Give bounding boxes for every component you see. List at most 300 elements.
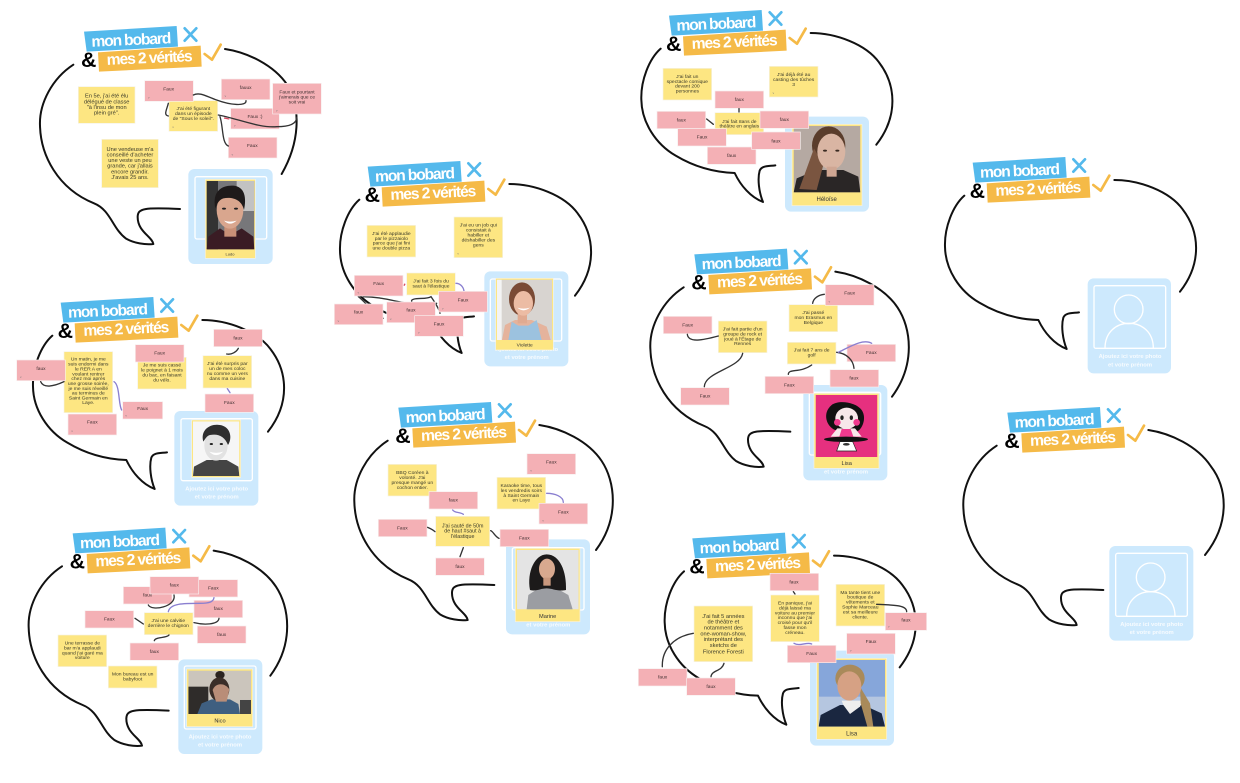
heading: mon bobard and mes 2 vérités (395, 402, 535, 448)
sticky: faux top right (214, 329, 262, 347)
note: poignet: du bac, en faisant (142, 372, 182, 378)
sticky: faux left: faux (658, 674, 668, 680)
note: RER: voulant rentrer (72, 371, 105, 377)
sticky: Faux (145, 81, 193, 101)
sticky: faux bottom (436, 558, 484, 575)
note: BBQ: BBQ Coréen à (396, 470, 429, 476)
sticky: Faux 4: Faux (434, 321, 445, 327)
note: théâtre: théâtre en anglais (720, 124, 760, 130)
note: Florence Foresti: J'ai fait 5 années (702, 614, 745, 620)
sticky: faux 4 (194, 600, 243, 618)
photo: black and white portrait (192, 420, 241, 477)
note: Erasmus: Belgique (804, 320, 823, 326)
sticky: faux top: faux (449, 498, 458, 504)
photo frame: et votre prénom (195, 495, 239, 501)
sticky: Faux right: Faux (866, 350, 877, 356)
note: BBQ: volonté. J'ai (399, 475, 425, 481)
sticky: Faux bottom left: Faux (700, 394, 711, 400)
sticky: faux 2: v (338, 319, 340, 323)
heading: mon bobard and mes 2 vérités (691, 249, 831, 295)
speech bubble (665, 556, 916, 725)
connectors behind (358, 283, 464, 318)
photo card: Ludo: Ludo (226, 251, 235, 256)
note: poignet: Je me suis cassé (143, 363, 181, 369)
note: spectacle: personnes (676, 89, 699, 95)
heading: mon bobard and mes 2 vérités: mon bobard (375, 165, 455, 186)
note: job: consistait à (466, 228, 491, 234)
sticky: fauux: fauux (240, 85, 252, 91)
note: coloc: dans ma cuisine (209, 376, 246, 382)
speech bubble (354, 425, 613, 620)
connectors (135, 595, 219, 641)
note: Sophie Marceau: boutique de (847, 595, 874, 601)
heading: mon bobard and mes 2 vérités: mes 2 vérités (106, 48, 193, 69)
heading: mon bobard and mes 2 vérités: mes 2 vérités (421, 424, 508, 445)
note: calvitie: derrière le chignon (148, 623, 189, 629)
note: terrasse (58, 635, 107, 667)
note: RER: suis endormi dans (68, 361, 109, 367)
sticky: Faux top right (825, 285, 874, 305)
note: Karaoke (497, 477, 546, 509)
sticky: Faux mid (847, 633, 895, 654)
note: BBQ: presque mangé un (392, 480, 433, 486)
note: Florence Foresti: sketchs de (710, 643, 737, 649)
sticky: Faux 5 (439, 291, 487, 312)
note: Karaoke: les vendredis soirs (501, 488, 542, 494)
sticky: Faux below note: Faux (87, 420, 98, 426)
sticky: Faux 2: Faux (558, 509, 569, 515)
sticky: fauux: v (225, 94, 227, 98)
heading: mon bobard and mes 2 vérités: mes 2 vérités (691, 32, 778, 53)
photo frame: et votre prénom (198, 743, 242, 749)
note: Florence Foresti: notamment des (704, 626, 743, 632)
sticky: Faux 5: Faux (458, 297, 469, 303)
sticky: faux right (885, 613, 927, 630)
sticky: Faux :) (231, 108, 279, 129)
heading: mon bobard and mes 2 vérités (666, 10, 806, 56)
panel: empty template card 2 (963, 407, 1224, 641)
sticky: faux (830, 370, 879, 387)
note: saut 50m: J'ai sauté de 50m (442, 524, 484, 530)
heading: mon bobard and mes 2 vérités: mes 2 vérités (715, 555, 802, 576)
sticky: Faux 1 (354, 275, 403, 296)
sticky: faux left (17, 360, 65, 381)
sticky: faux 3: faux (406, 308, 416, 314)
note: Erasmus: J'ai passé (802, 310, 825, 316)
sticky: Faux 3 (189, 580, 238, 597)
heading: mon bobard and mes 2 vérités (689, 533, 829, 579)
panel: Violette card (334, 161, 591, 366)
note: théâtre (715, 113, 764, 135)
note: créneau: fasse mon (783, 625, 807, 631)
sticky: faux right: faux (901, 617, 911, 623)
note: job: v (457, 251, 459, 255)
note: spectacle: devant 200 (675, 84, 700, 90)
heading: mon bobard and mes 2 vérités: & (395, 424, 411, 448)
note: créneau (771, 595, 819, 642)
photo frame: et votre prénom (526, 623, 570, 629)
note: créneau: En panique, j'ai (778, 601, 812, 607)
sticky: Faux et pourtant (273, 83, 321, 114)
note: élu délégué: délégué de classe (84, 99, 129, 105)
photo frame (785, 117, 869, 212)
photo card: Lisa (817, 658, 887, 739)
note: créneau: inconnu que j'ai (778, 615, 812, 621)
note: pizza: une double pizza (372, 246, 410, 252)
speech bubble (40, 49, 297, 244)
note: spectacle: spectacle comique (667, 79, 708, 85)
note: babyfoot: babyfoot (123, 677, 143, 683)
sticky: faux 5 (197, 626, 246, 643)
note: Karaoke: Karaoke time, tous (501, 483, 543, 489)
sticky: Faux et pourtant: j'aimerais que ce (278, 94, 315, 100)
sticky: Faux et pourtant: soit vrai (289, 99, 305, 105)
note: job: J'ai eu un job qui (460, 223, 497, 229)
sticky: faux 2 (334, 304, 383, 325)
note: groupe de rock: joué à l'Étage de (723, 335, 761, 342)
sticky: Faux bottom: v (232, 152, 234, 156)
note: job: gens (473, 242, 484, 248)
connectors (687, 294, 872, 387)
photo frame: Ajoutez ici votre photo (495, 347, 559, 353)
photo frame: et votre prénom (505, 355, 549, 361)
photo card: Violette (496, 278, 553, 350)
note: figurant: J'ai été figurant (177, 106, 211, 112)
sticky: Faux 3: Faux (208, 585, 219, 591)
note: créneau: voiture au premier (775, 610, 815, 616)
sticky: Faux right (500, 529, 549, 547)
sticky: Faux left (663, 316, 712, 334)
sticky: Faux 5: v (442, 306, 444, 310)
note: vendeuse: grande, car j'allais (107, 164, 153, 170)
note: élu délégué: "à l'insu de mon (87, 105, 127, 111)
sticky: faux bottom: faux (706, 684, 716, 690)
panel: anonymous RER card (17, 297, 284, 506)
sticky: faux 3: v (390, 317, 392, 321)
note: pizza (367, 225, 416, 257)
photo card: Ludo (205, 179, 255, 258)
sticky: Faux below note: v (71, 429, 73, 433)
note: terrasse: Une terrasse de (65, 640, 100, 646)
note: poignet: du vélo. (153, 377, 171, 383)
heading: mon bobard and mes 2 vérités: mon bobard (676, 14, 757, 35)
note: vendeuse (102, 139, 158, 188)
note: Sophie Marceau: est sa meilleure (843, 609, 878, 615)
note: terrasse: voiture (75, 655, 90, 661)
sticky: faux 7 (130, 643, 179, 660)
note: créneau: croisé pour qu'il (778, 620, 812, 626)
sticky: faux left: v (20, 375, 22, 379)
note: RER: le RER A en (75, 366, 102, 372)
heading: mon bobard and mes 2 vérités: & (70, 550, 85, 574)
sticky: Faux under coloc (205, 394, 254, 412)
sticky: faux 2 (150, 577, 199, 594)
note: saut 50m: l'élastique (451, 534, 474, 540)
speech bubble (29, 551, 287, 746)
sticky: faux right: v (888, 625, 890, 629)
sticky: Faux center (787, 645, 836, 663)
note: RER: au terminus de (72, 391, 105, 397)
heading: mon bobard and mes 2 vérités: mon bobard (405, 406, 486, 427)
speech bubble (963, 430, 1224, 625)
speech bubble (650, 272, 909, 467)
note: BBQ: cochon entier. (397, 485, 428, 491)
sticky: Faux 1: v (530, 469, 532, 473)
note: RER: je me suis réveillé (68, 386, 108, 392)
note: spectacle (663, 68, 712, 100)
heading: mon bobard and mes 2 vérités: mon bobard (980, 161, 1060, 182)
photo placeholder (1088, 278, 1171, 373)
note: élastique: J'ai fait 3 fois du (413, 279, 449, 285)
sticky: Faux on poignet (135, 345, 184, 362)
note: calvitie: J'ai une calvitie (152, 618, 185, 624)
speech bubble (945, 180, 1196, 349)
note: groupe de rock (718, 321, 767, 353)
photo placeholder: et votre prénom (1130, 630, 1174, 636)
sticky: faux bottom (707, 147, 756, 164)
note: job (454, 217, 503, 258)
heading: mon bobard and mes 2 vérités (81, 26, 221, 72)
photo card: Héloïse: Héloïse (817, 197, 837, 203)
note: vendeuse: encore grandir. (111, 169, 149, 175)
sticky: Faux bottom (765, 376, 814, 394)
heading: mon bobard and mes 2 vérités: & (1004, 429, 1020, 453)
note: élu délégué (78, 87, 135, 123)
sticky: Faux 2 (539, 503, 588, 524)
note: calvitie (144, 613, 193, 635)
photo frame (506, 539, 590, 634)
note: Sophie Marceau: Sophie Marceau (842, 604, 879, 610)
note: terrasse: bar m'a applaudi (64, 645, 101, 651)
sticky: faux bottom (687, 678, 735, 695)
sticky: faux 5: faux (217, 632, 227, 638)
panel: Nico card (29, 528, 287, 754)
sticky: faux left: faux (677, 117, 686, 123)
sticky: faux bottom: faux (455, 564, 465, 570)
note: coloc: J'ai été surpris par (207, 361, 248, 367)
photo placeholder: et votre prénom (1108, 362, 1152, 368)
note: Florence Foresti: de théâtre et (707, 620, 740, 626)
note: Florence Foresti: Florence Foresti (703, 650, 744, 656)
sticky: Faux center: Faux (806, 651, 818, 657)
note: Florence Foresti (694, 606, 753, 662)
panel: Héloïse card (641, 10, 892, 212)
sticky: Faux left: Faux (682, 322, 694, 328)
sticky: faux left (638, 669, 687, 686)
sticky: Faux mid: Faux (866, 639, 877, 645)
note: Karaoke: en Laye (512, 498, 530, 504)
heading: mon bobard and mes 2 vérités: mes 2 vérités (83, 319, 170, 340)
photo frame (484, 271, 568, 366)
sticky: Faux left (378, 519, 427, 537)
sticky: Faux right: Faux (519, 535, 530, 541)
sticky: Faux 6 (85, 611, 134, 628)
sticky: faux top: faux (789, 579, 799, 585)
note: groupe de rock: J'ai fait partie d'un (723, 327, 763, 333)
photo frame (178, 659, 262, 754)
heading: mon bobard and mes 2 vérités: & (689, 555, 705, 579)
panel: empty template card 1 (945, 157, 1196, 373)
note: élastique: saut à l'élastique (413, 284, 450, 290)
photo frame: et votre prénom (824, 470, 868, 476)
heading: mon bobard and mes 2 vérités: mon bobard (80, 532, 160, 552)
connectors (166, 94, 297, 146)
note: élastique (407, 273, 455, 295)
heading: mon bobard and mes 2 vérités: & (970, 179, 985, 203)
note: babyfoot (108, 666, 157, 688)
sticky: Faux (678, 129, 726, 146)
note: poignet (138, 357, 186, 389)
sticky: faux 4: faux (214, 606, 223, 612)
sticky: Faux 1: Faux (546, 459, 557, 465)
sticky: faux right 2 (752, 132, 800, 149)
note: vendeuse: une veste un peu (108, 158, 152, 164)
photo card: Nico (187, 669, 253, 727)
heading: mon bobard and mes 2 vérités (365, 161, 504, 207)
sticky: faux 1 (123, 587, 172, 604)
note: RER: chez moi après (71, 376, 106, 382)
heading: mon bobard and mes 2 vérités: mon bobard (91, 30, 172, 51)
photo card: Lisa: Lisa (846, 731, 858, 737)
connectors (41, 348, 238, 410)
note: job: habiller et (468, 233, 490, 239)
note: Erasmus (789, 305, 838, 332)
note: BBQ (388, 464, 437, 496)
note: figurant: de "Sous le soleil". (173, 116, 214, 122)
sticky: Faux 1: Faux (373, 281, 385, 287)
sticky: Faux 4: v (418, 331, 420, 335)
photo placeholder: Ajoutez ici votre photo (1120, 622, 1184, 628)
sticky: Faux et pourtant: v (276, 108, 278, 112)
heading: mon bobard and mes 2 vérités (70, 528, 209, 574)
heading: mon bobard and mes 2 vérités (58, 297, 197, 343)
photo frame: Ajoutez ici votre photo (185, 487, 249, 493)
sticky: faux left: faux (36, 366, 46, 372)
photo frame (810, 651, 894, 746)
note: RER: Laye. (82, 400, 94, 406)
note: saut 50m: de haut #saut à (444, 529, 481, 535)
heading: mon bobard and mes 2 vérités: mon bobard (699, 537, 780, 557)
photo placeholder (1109, 546, 1193, 641)
note: figurant: dans un épisode (175, 111, 212, 117)
note: RER (64, 352, 113, 413)
note: figurant (169, 101, 218, 131)
sticky: Faux: Faux (697, 134, 708, 140)
note: Sophie Marceau: Ma tante tient une (840, 590, 881, 596)
heading: mon bobard and mes 2 vérités: & (365, 183, 380, 207)
sticky: faux 7: faux (150, 649, 159, 655)
heading: mon bobard and mes 2 vérités: & (691, 271, 707, 295)
photo card: Héloïse (792, 124, 862, 206)
note: pizza: J'ai été applaudie (372, 231, 411, 237)
sticky: Faux bottom: Faux (784, 382, 795, 388)
speech bubble (33, 320, 284, 489)
note: créneau: créneau. (785, 630, 805, 636)
photo card: Lisa illustration: Lisa (841, 461, 853, 467)
note: RER: Un matin, je me (71, 357, 106, 363)
note: golf: golf (808, 353, 816, 359)
sticky: Faux 1: v (358, 290, 360, 294)
note: babyfoot: Mon bureau est un (112, 672, 154, 678)
sticky: faux 1: faux (143, 592, 153, 598)
photo card: Marine (515, 548, 580, 622)
note: coloc: un de mes coloc (209, 366, 246, 372)
photo card: Lisa illustration (814, 393, 879, 468)
sticky: faux 2: faux (170, 583, 179, 589)
note: tûches (769, 66, 818, 97)
sticky: faux top (715, 91, 764, 108)
heading: mon bobard and mes 2 vérités: mes 2 vérités (95, 550, 182, 571)
photo placeholder: Ajoutez ici votre photo (1099, 354, 1162, 360)
connectors (428, 493, 563, 557)
sticky: faux top (429, 492, 478, 509)
note: théâtre: J'ai fait 8ans de (722, 119, 757, 125)
photo frame (174, 411, 258, 506)
panel: Lisa photo card (638, 533, 927, 746)
sticky: Faux: Faux (163, 86, 175, 92)
sticky: faux right 1 (760, 111, 809, 128)
heading: mon bobard and mes 2 vérités (970, 157, 1109, 203)
sticky: Faux bottom left (681, 388, 729, 405)
note: Sophie Marceau: vêtements et (846, 599, 875, 605)
sticky: Faux under coloc: Faux (224, 400, 235, 406)
note: terrasse: quand j'ai garé ma (62, 650, 103, 656)
sticky: Faux bottom: Faux (247, 143, 258, 149)
sticky: Faux 1 (527, 454, 576, 474)
note: Sophie Marceau: cliente. (852, 614, 868, 620)
note: Karaoke: à Saint Germain (503, 493, 540, 499)
sticky: faux right 1: faux (780, 117, 789, 123)
sticky: faux: faux (849, 376, 859, 382)
sticky: faux bottom: faux (727, 153, 737, 159)
sticky: Faux right of note: Faux (137, 406, 149, 412)
speech bubble (340, 184, 591, 353)
panel: Lisa illustrated card (650, 249, 909, 480)
note: golf: J'ai fait 7 ans de (794, 348, 830, 354)
note: RER: une grosse soirée, (68, 381, 109, 387)
note: vendeuse: Une vendeuse m'a (106, 147, 154, 153)
sticky: Faux on poignet: Faux (154, 351, 166, 357)
heading: mon bobard and mes 2 vérités: mes 2 vérités (995, 179, 1082, 200)
note: coloc: nu comme un vers (207, 371, 248, 377)
note: tûches: J'ai déjà été au (777, 72, 811, 78)
note: groupe de rock: Rennes (734, 341, 752, 347)
photo frame: Ajoutez ici votre photo (189, 735, 252, 741)
sticky: Faux right (847, 344, 896, 362)
speech bubble (641, 33, 892, 202)
note: job: déshabiller des (462, 237, 496, 243)
note: spectacle: J'ai fait un (676, 74, 699, 80)
sticky: Faux bottom (228, 137, 277, 158)
sticky: Faux mid: v (850, 648, 852, 652)
sticky: Faux right of note: v (125, 413, 127, 417)
sticky: Faux et pourtant: Faux et pourtant (279, 89, 315, 95)
sticky: Faux top right: v (829, 300, 831, 304)
note: coloc (203, 356, 252, 388)
note: pizza: parce que j'ai fini (373, 241, 410, 247)
panel: Marine card (354, 402, 613, 634)
note: créneau: déjà laissé ma (779, 605, 811, 611)
note: Erasmus: mon Erasmus en (794, 315, 832, 321)
note: Sophie Marceau (836, 584, 885, 626)
sticky: faux top right: faux (233, 335, 243, 341)
heading: mon bobard and mes 2 vérités (1004, 407, 1144, 453)
note: pizza: par le pizzaiolo (375, 236, 408, 242)
sticky: Faux 4 (415, 316, 463, 336)
note: poignet: le poignet à 1 mois (141, 368, 183, 374)
heading: mon bobard and mes 2 vérités: mon bobard (68, 301, 148, 322)
note: vendeuse: conseillé d'acheter (107, 153, 153, 159)
